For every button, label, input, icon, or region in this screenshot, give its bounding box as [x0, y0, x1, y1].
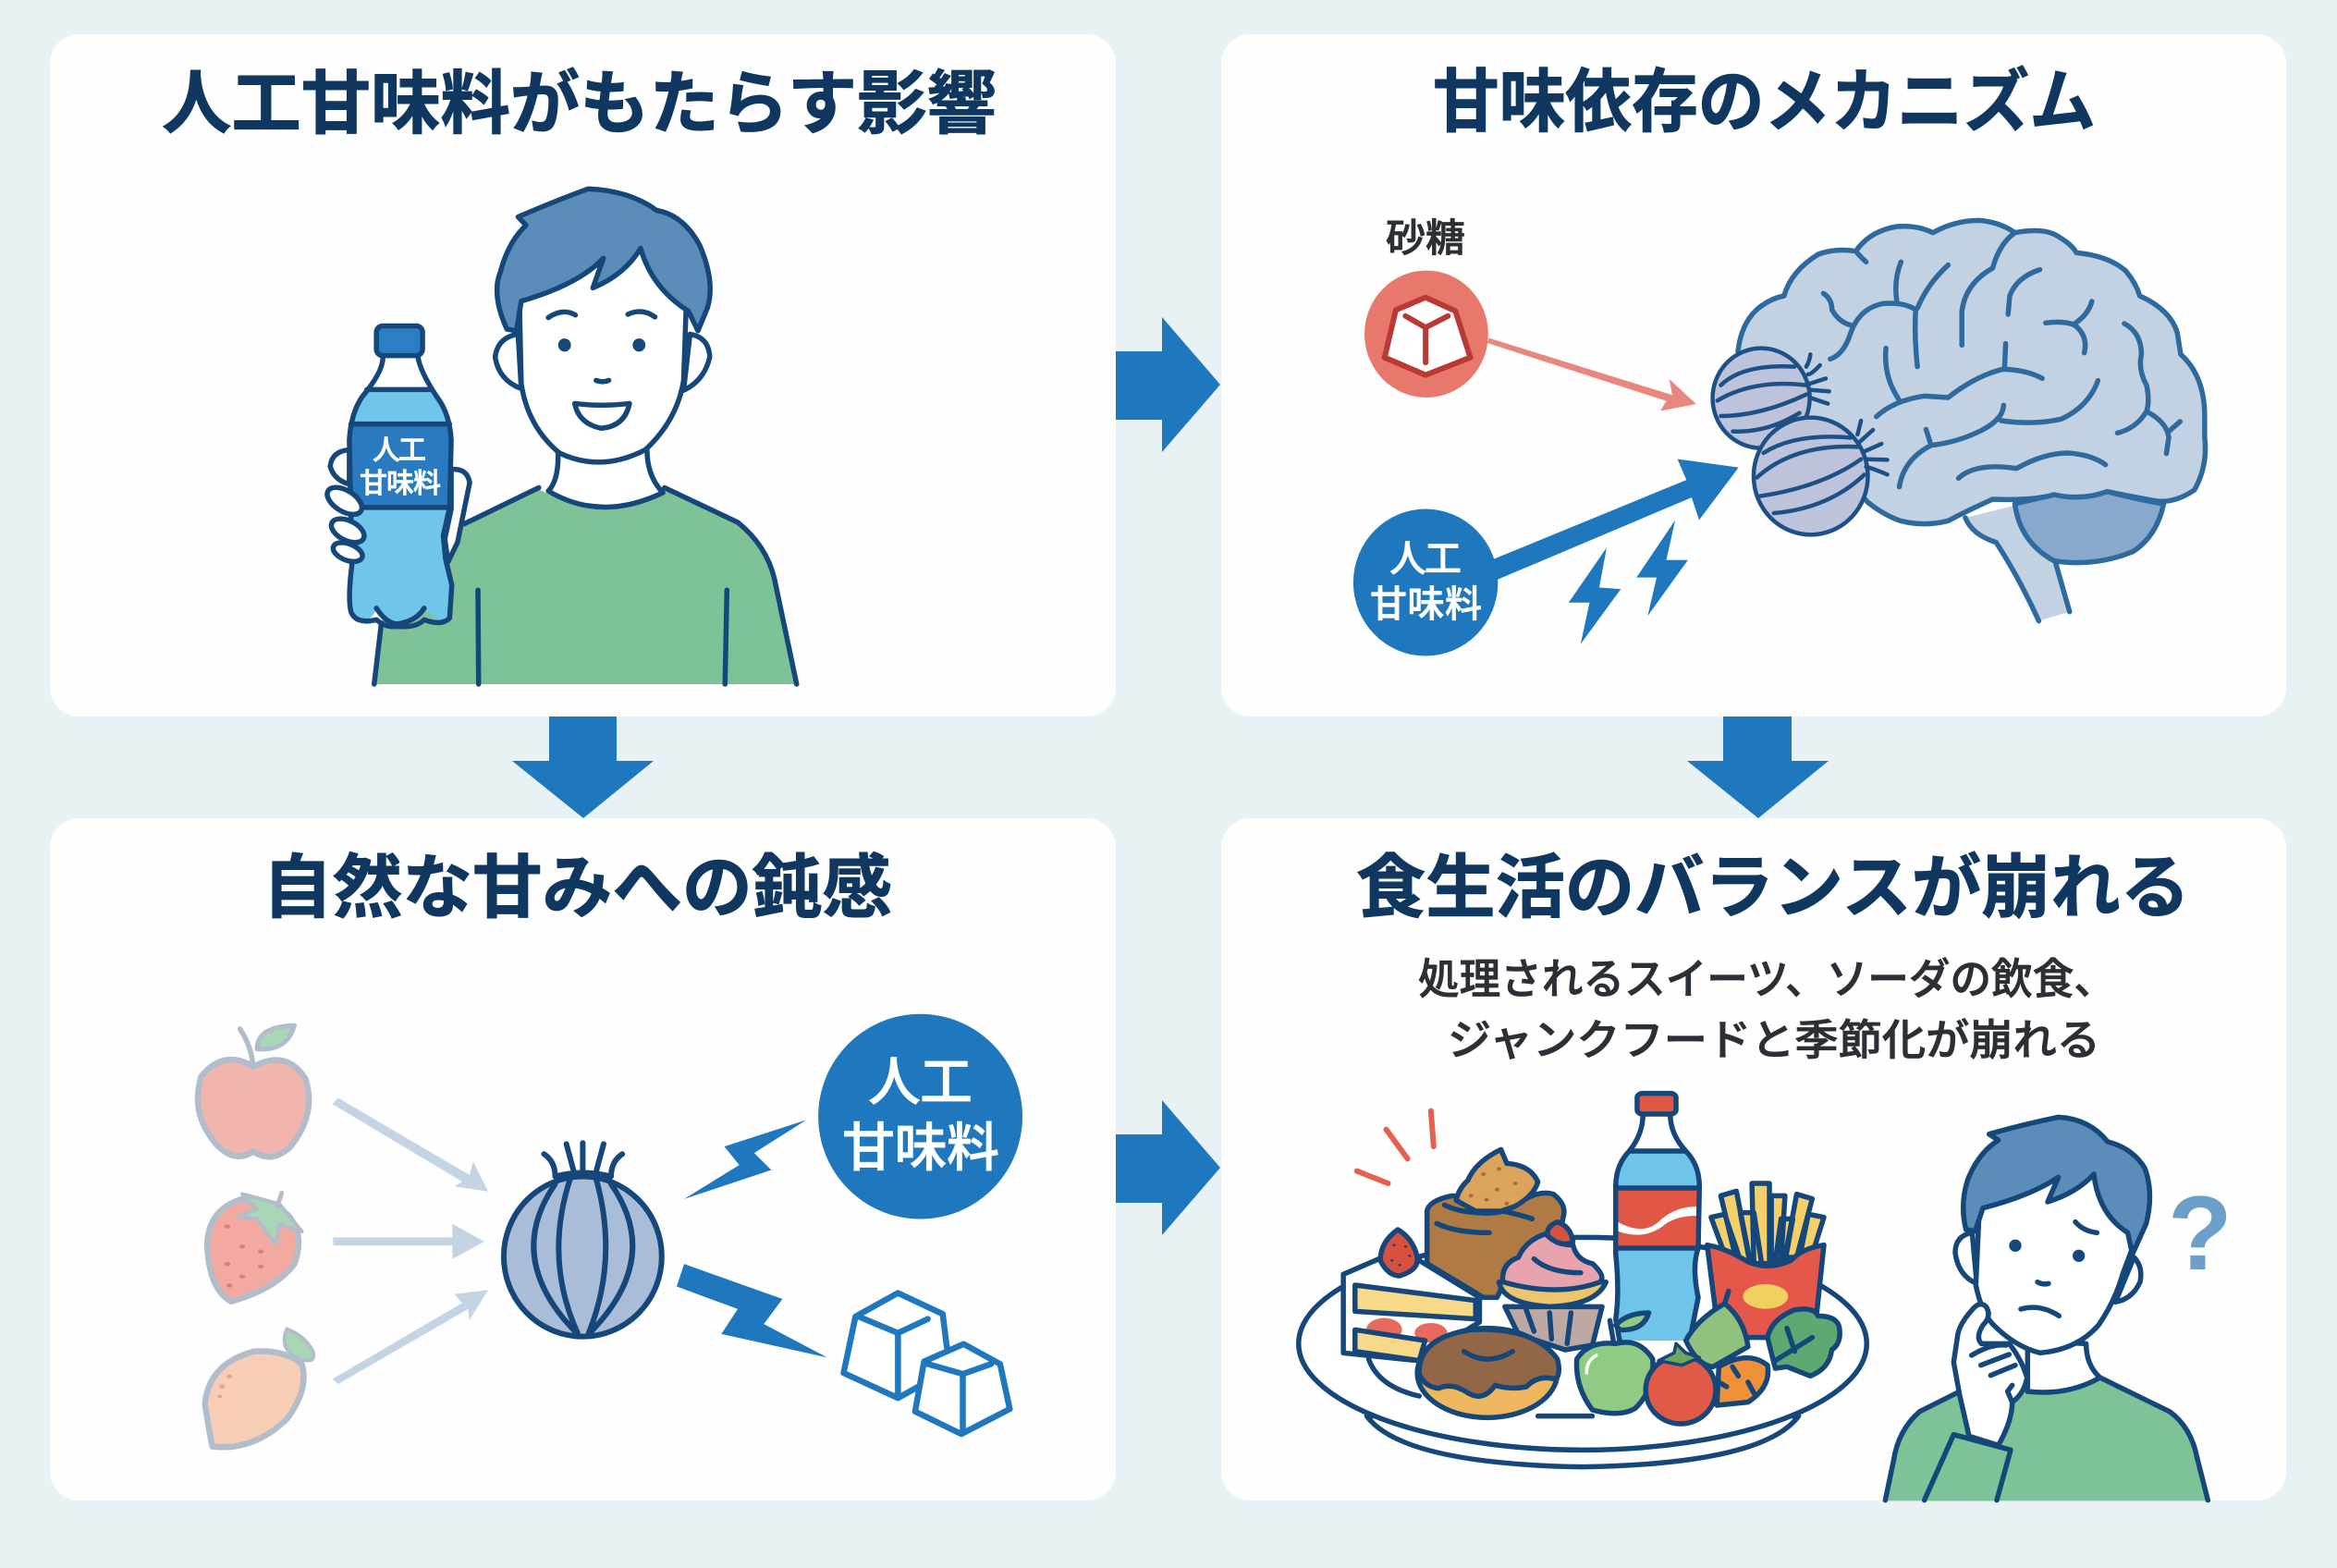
- shirt outline: [374, 487, 797, 684]
- heading: effects of artificial sweeteners: 人工甘味料がもたらす影響: [162, 65, 997, 142]
- sugar cubes: [844, 1293, 1009, 1434]
- pear: [1686, 1292, 1748, 1366]
- arrow: panel 3 to panel 4: [1116, 1100, 1220, 1235]
- reward center 1: [1713, 349, 1829, 448]
- neck: [2027, 1341, 2100, 1392]
- onion-shaped taste receptor: [504, 1143, 662, 1337]
- neck: [548, 449, 663, 507]
- diagram inputs: sugar and sweetener: [1353, 271, 1739, 656]
- apple: [198, 1025, 309, 1157]
- ears: [496, 334, 710, 390]
- heading: diet balance: 食生活のバランスが崩れる: [1356, 849, 2190, 926]
- body text: [1418, 955, 2115, 1064]
- lightning: toward sugar: [677, 1264, 827, 1357]
- cupcake: [1499, 1222, 1606, 1350]
- label: sugar: 砂糖: [1386, 216, 1465, 260]
- cerebellum: [2015, 492, 2163, 563]
- arrow: sugar to brain: [1487, 338, 1696, 411]
- worried expression: [2009, 1222, 2097, 1316]
- hand back: [330, 449, 349, 484]
- panel: effects of artificial sweeteners: [50, 34, 1116, 717]
- arrow: panel 1 to panel 3: [512, 717, 654, 818]
- lemon: [205, 1329, 313, 1447]
- heading: dulled sensitivity: 自然な甘みへの鈍感: [263, 849, 892, 926]
- chocolate muffin: [1427, 1149, 1564, 1297]
- hair: [497, 189, 710, 331]
- eyes, brows, nose, mouth: [548, 312, 655, 428]
- leafy greens: [1768, 1309, 1840, 1376]
- shirt outline: [1885, 1378, 2208, 1501]
- green apple: [1576, 1313, 1653, 1414]
- plate: [1299, 1237, 1866, 1467]
- bottle: [349, 325, 452, 627]
- shirt cuff fill: [1925, 1435, 2011, 1501]
- arrow: panel 2 to panel 4: [1687, 717, 1829, 818]
- illustration: food plate: [1299, 1094, 1866, 1467]
- heading: mechanism: 甘味依存のメカニズム: [1433, 63, 2096, 141]
- fries: [1707, 1183, 1824, 1338]
- panel: sweet taste dependence mechanism: [1221, 34, 2286, 717]
- sweetener label: 甘味料: [1370, 584, 1482, 625]
- cake slice: [1343, 1230, 1479, 1361]
- carrot marks: [1719, 1366, 1754, 1393]
- diagram: taste dulling: [198, 1014, 1022, 1447]
- cola bottle: [1616, 1094, 1699, 1341]
- shirt cuff outline: [1925, 1435, 2011, 1501]
- question mark: ?: [2168, 1175, 2233, 1292]
- surprise marks: [1357, 1111, 1434, 1183]
- illustration: man holding bottle: [323, 189, 797, 684]
- fingers: [323, 482, 368, 565]
- lightning: toward sweetener: [684, 1120, 806, 1199]
- lightning bolts: [1569, 520, 1688, 644]
- hand on chin: [1953, 1305, 2027, 1445]
- panel: dulled sense of natural sweetness: [50, 818, 1116, 1501]
- strawberry: [207, 1193, 301, 1302]
- brain folds: [1823, 233, 2180, 487]
- cerebrum: [1738, 220, 2206, 524]
- carrot: [1717, 1358, 1768, 1405]
- body text: ジャンクフードと季節化が崩れる: [1448, 1016, 2100, 1064]
- ears: [1955, 1232, 2141, 1302]
- sweetener label: 人工: [1389, 539, 1462, 580]
- bottle label: 甘味料: [360, 469, 441, 499]
- panel: diet balance collapses: [1221, 818, 2286, 1501]
- sugar icon: [1364, 271, 1488, 398]
- shirt: [1885, 1378, 2208, 1501]
- hair: [1964, 1117, 2149, 1255]
- arrow: sweetener to brain: [1489, 459, 1739, 580]
- illustration: worried man: [1885, 1117, 2208, 1501]
- greens veins: [1775, 1329, 1812, 1361]
- reward center 2: [1754, 418, 1888, 534]
- bottle label: 人工: [373, 435, 426, 466]
- sweetener label: 甘味料: [842, 1119, 999, 1178]
- sweetener circle: [818, 1014, 1022, 1219]
- face: [1976, 1162, 2133, 1353]
- sweetener label: 人工: [868, 1053, 973, 1112]
- donut: [1417, 1329, 1559, 1417]
- brain stem: [1965, 506, 2070, 621]
- sweetener label: [842, 1053, 999, 1178]
- sweetener circle: [1353, 509, 1498, 656]
- tomato: [1646, 1343, 1716, 1424]
- brain stem outline: [1965, 518, 2070, 621]
- arrow: panel 1 to panel 2: [1116, 317, 1220, 452]
- bottle label: [360, 435, 441, 499]
- pale arrows from fruit: [333, 1098, 488, 1384]
- arm beside bottle: [445, 470, 470, 562]
- body text: 処理されるスイーツ、ソーダの飲食、: [1418, 955, 2115, 1003]
- face: [518, 241, 689, 462]
- sweetener label: [1370, 539, 1482, 625]
- brain illustration: [1713, 220, 2206, 621]
- shirt: [374, 489, 797, 684]
